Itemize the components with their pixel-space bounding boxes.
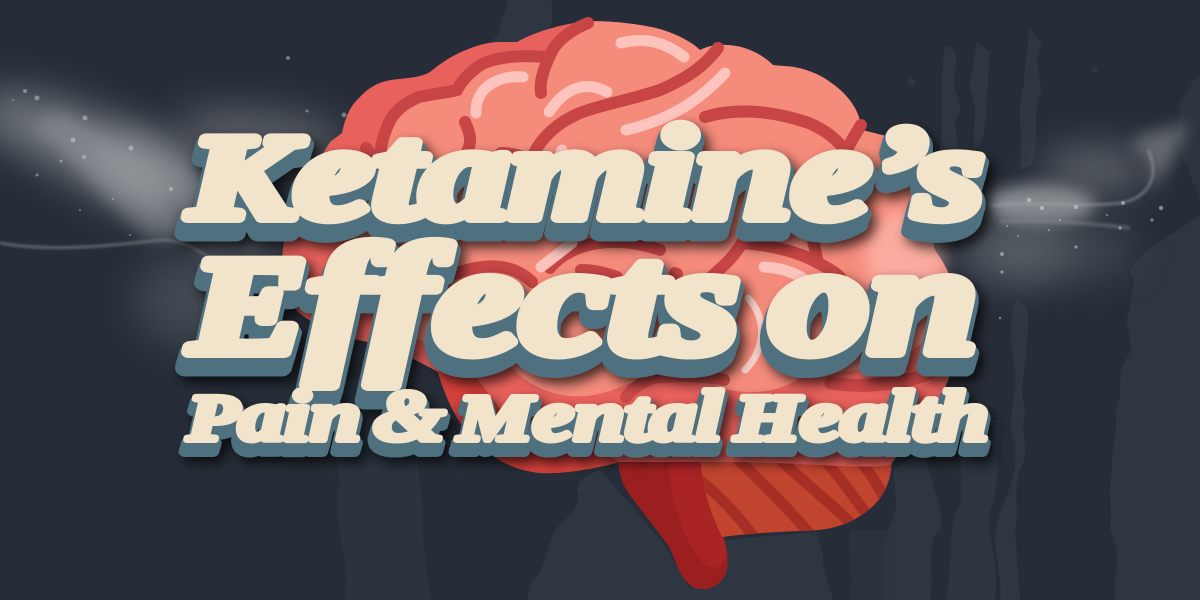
brain light right lobe [865,210,945,300]
fold lines [366,23,930,397]
title shadow extrusion: Effects on [187,220,978,392]
title shadow extrusion: Pain & Mental Health [186,381,989,461]
title shadow extrusion: Ketamine’s [186,109,982,257]
cerebellum [700,462,892,537]
title shadow extrusion: Effects on [184,230,975,402]
background paint drips [336,0,1200,600]
smoke right [960,122,1188,319]
title shadow extrusion: Ketamine’s [185,114,981,262]
title cream lettering: Ketamine’s [188,98,984,246]
title cream lettering: Pain & Mental Health [186,376,989,456]
title [184,98,989,468]
title shadow extrusion: Pain & Mental Health [185,385,988,465]
title shadow extrusion: Effects on [186,225,976,397]
title shadow extrusion: Pain & Mental Health [184,388,987,468]
brain [282,21,956,589]
brain dark salmon silhouette [282,21,956,473]
title shadow extrusion [184,104,989,468]
brain stem [618,455,728,589]
smoke left [0,56,346,345]
title cream lettering: Effects on [187,214,978,386]
title shadow extrusion: Ketamine’s [188,104,984,252]
title cream lettering [186,98,989,456]
highlights [476,41,809,370]
brain lower red lobe [438,364,620,473]
brain pink upper lobes [352,21,953,396]
